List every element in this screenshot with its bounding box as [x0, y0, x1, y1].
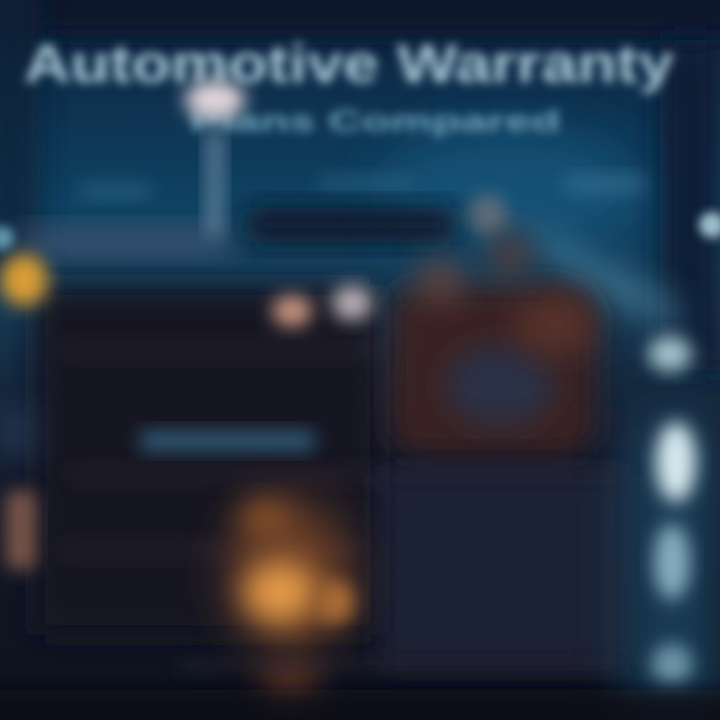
panel: left dark grid	[35, 285, 380, 635]
left dark corner	[0, 0, 40, 280]
table rows	[60, 345, 630, 670]
left horizon haze	[20, 228, 230, 254]
top dark band	[0, 0, 720, 35]
panel: right reddish grid	[390, 195, 595, 455]
small header labels	[80, 175, 645, 197]
left pale reflections	[0, 226, 36, 570]
blue label	[140, 430, 315, 452]
right water reflection	[625, 212, 720, 720]
subtitle: Plans Compared	[190, 105, 560, 138]
headlights	[272, 285, 372, 327]
bottom shadow	[0, 690, 720, 720]
title: Automotive Warranty	[24, 34, 674, 94]
bright teal sky	[380, 130, 640, 250]
lower right panel	[380, 475, 630, 665]
left yellow light	[0, 254, 48, 306]
orange fire glow	[230, 500, 355, 710]
right dark sky	[660, 40, 720, 370]
lamp post glow	[185, 80, 245, 235]
title block	[24, 34, 674, 138]
car roof	[245, 208, 460, 242]
right horizon haze	[520, 215, 680, 335]
